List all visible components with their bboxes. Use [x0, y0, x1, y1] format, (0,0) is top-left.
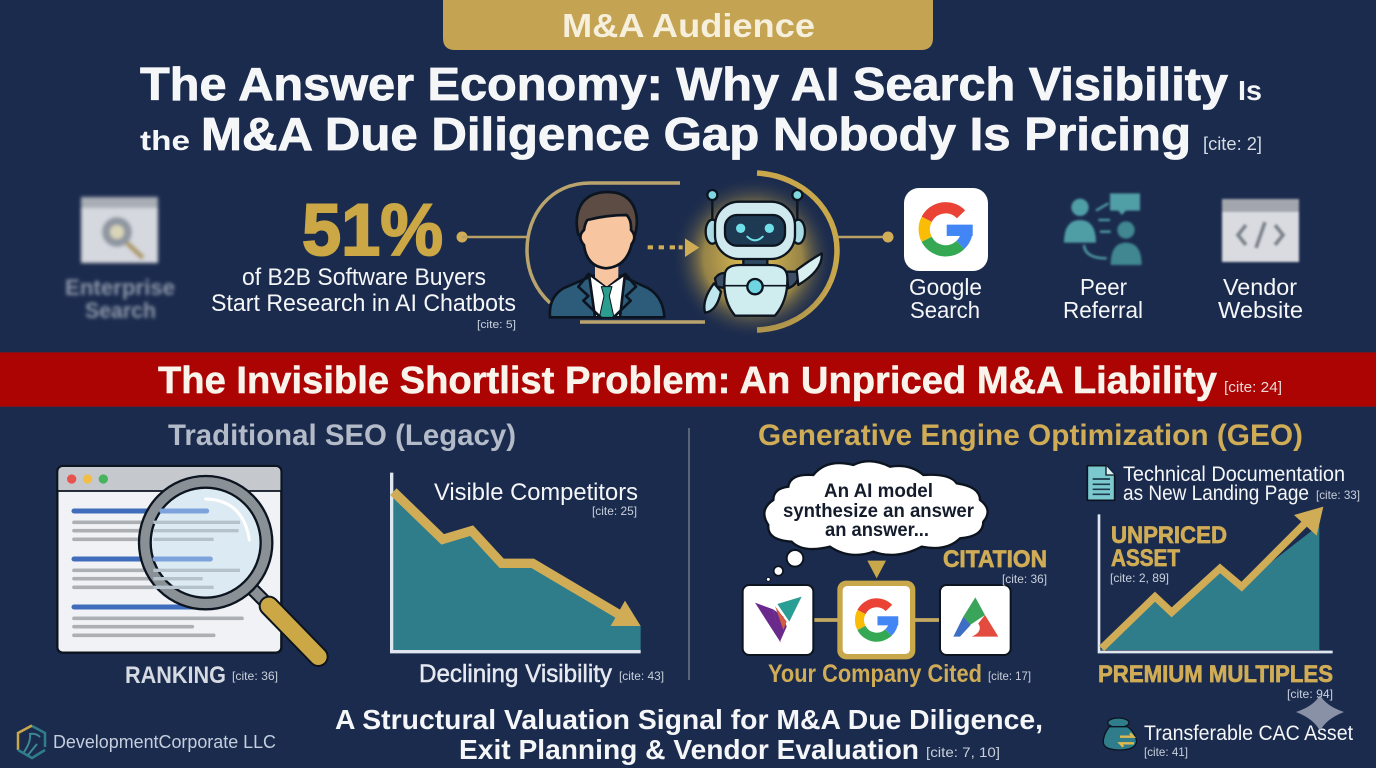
label: unpriced asset [1110, 522, 1227, 585]
red banner: invisible shortlist problem [0, 352, 1376, 407]
icon: robot [704, 190, 822, 316]
label: ranking: [cite: 36] [232, 669, 278, 683]
callout: AI thought cloud: An AI model [824, 481, 933, 502]
label: visible competitors [434, 479, 638, 518]
label: unpriced asset: UNPRICED [1111, 522, 1227, 549]
statistic: 51 percent: Start Research in AI Chatbots [211, 290, 516, 317]
label: declining visibility: [cite: 43] [619, 669, 664, 683]
chart: rising premium multiples [1099, 507, 1333, 652]
label: visible competitors: Visible Competitors [434, 479, 638, 506]
logo: DevelopmentCorporate LLC [18, 726, 276, 758]
label: premium multiples: [cite: 94] [1287, 687, 1333, 701]
label: your company cited: Your Company Cited [768, 660, 982, 688]
option: google search [904, 188, 988, 323]
option: google search: Search [910, 297, 980, 323]
title [140, 58, 1262, 160]
statistic: 51 percent [211, 190, 516, 331]
label: visible competitors: [cite: 25] [592, 504, 637, 518]
label: citation: [cite: 36] [1002, 572, 1047, 586]
label: transferable CAC asset: Transferable CAC Asset [1144, 722, 1353, 745]
option: peer referral: Referral [1063, 297, 1143, 323]
label: transferable CAC asset [1144, 722, 1353, 759]
closing statement: Exit Planning & Vendor Evaluation [459, 734, 919, 765]
icon: document [1087, 466, 1115, 500]
label: citation [943, 546, 1047, 586]
option: vendor website: Vendor [1223, 274, 1297, 300]
option: enterprise search (blurred) [65, 197, 175, 323]
label: unpriced asset: [cite: 2, 89] [1110, 571, 1169, 585]
statistic: 51 percent: 51% [302, 190, 443, 271]
arrow: person to robot [648, 238, 699, 257]
option: peer referral: Peer [1080, 274, 1127, 300]
option: peer referral [1063, 193, 1143, 323]
option: vendor website [1218, 199, 1303, 323]
title: The Answer Economy: Why AI Search Visibility [140, 58, 1228, 110]
callout: AI thought cloud: synthesize an answer [783, 501, 975, 522]
label: premium multiples [1098, 661, 1333, 701]
closing statement: [cite: 7, 10] [926, 744, 1000, 760]
icon: sparkle watermark [1296, 695, 1344, 731]
title: the [140, 125, 190, 156]
option: enterprise search (blurred): Search [85, 298, 156, 323]
label: technical documentation [1123, 463, 1360, 505]
icon: transferable asset bag [1103, 718, 1137, 750]
diagram: cited company logos [743, 561, 1011, 659]
label: technical documentation: as New Landing Page [1123, 482, 1309, 505]
title: M&A Due Diligence Gap Nobody Is Pricing [201, 108, 1191, 160]
red banner: invisible shortlist problem: The Invisible Shortlist Problem: An Unpriced M&A Liability [158, 360, 1217, 402]
red banner: invisible shortlist problem: [cite: 24] [1224, 379, 1282, 396]
option: google search: Google [909, 274, 982, 300]
option: vendor website: Website [1218, 297, 1303, 323]
label: declining visibility: Declining Visibility [419, 660, 612, 688]
icon: browser with magnifying glass [57, 466, 318, 657]
label: unpriced asset: ASSET [1111, 545, 1180, 572]
label: premium multiples: PREMIUM MULTIPLES [1098, 661, 1333, 688]
closing statement [335, 704, 1043, 765]
connector: statistic to person [456, 232, 528, 242]
heading: generative engine optimization: Generative Engine Optimization (GEO) [758, 419, 1303, 452]
label: ranking: RANKING [125, 662, 226, 689]
label: technical documentation: [cite: 33] [1316, 488, 1360, 502]
icon: gold arcs around person and robot [527, 173, 894, 330]
statistic: 51 percent: of B2B Software Buyers [242, 264, 486, 291]
icon: robot glow [671, 176, 835, 340]
title: [cite: 2] [1203, 134, 1262, 154]
logo: DevelopmentCorporate LLC: DevelopmentCorporate LLC [53, 732, 276, 752]
icon: business person [550, 192, 664, 318]
callout: AI thought cloud [764, 461, 988, 581]
label: technical documentation: Technical Documentation [1123, 463, 1345, 486]
label: transferable CAC asset: [cite: 41] [1144, 745, 1188, 759]
chart: declining visibility [392, 473, 641, 652]
statistic: 51 percent: [cite: 5] [477, 319, 516, 331]
callout: AI thought cloud: an answer... [825, 520, 929, 541]
audience banner: M&A Audience [562, 7, 815, 44]
label: your company cited: [cite: 17] [988, 669, 1031, 683]
heading: traditional SEO: Traditional SEO (Legacy) [168, 419, 516, 452]
closing statement: A Structural Valuation Signal for M&A Due Diligence, [335, 704, 1043, 735]
audience banner [443, 0, 933, 50]
title: Is [1238, 75, 1262, 106]
label: citation: CITATION [943, 546, 1047, 573]
option: enterprise search (blurred): Enterprise [65, 275, 175, 300]
